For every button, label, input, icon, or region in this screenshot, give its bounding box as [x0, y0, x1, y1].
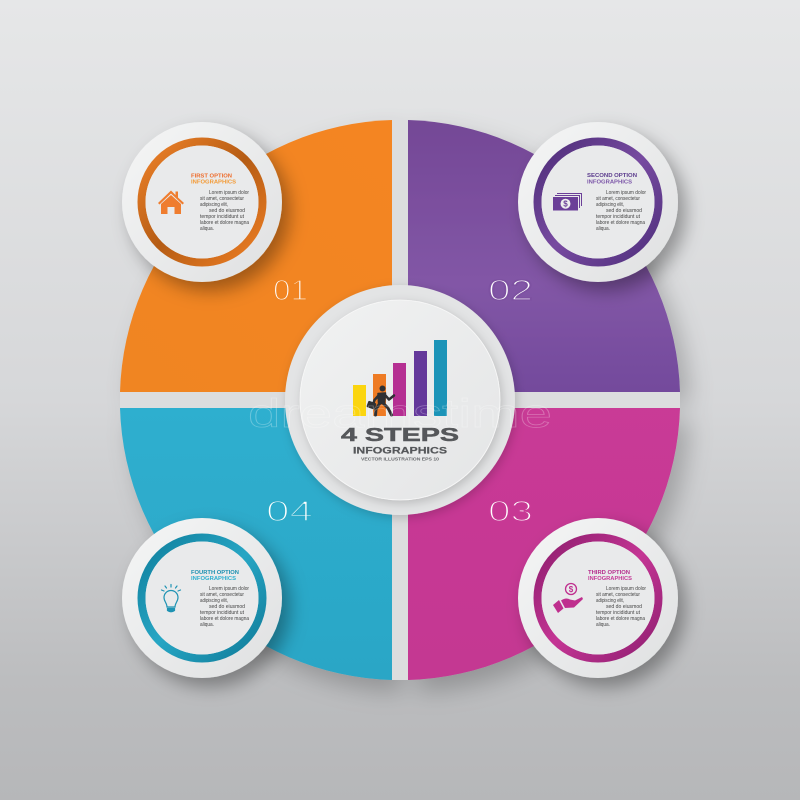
card body text: adipiscing elit,	[596, 598, 624, 604]
central hub	[285, 285, 515, 515]
card body text: sit amet, consectetur	[200, 592, 244, 598]
card body text: Lorem ipsum dolor	[209, 586, 249, 592]
card body text	[200, 586, 249, 628]
option card 2: second option	[518, 122, 678, 282]
card body text: sit amet, consectetur	[596, 592, 640, 598]
card body text: labore et dolore magna	[200, 616, 249, 622]
card inner disc	[542, 146, 654, 258]
accent ring	[142, 142, 262, 262]
card heading: FOURTH OPTION	[191, 570, 239, 576]
card heading	[587, 173, 637, 186]
card body text: adipiscing elit,	[200, 202, 228, 208]
bar chart icon	[353, 340, 447, 416]
option card 4: fourth option	[122, 518, 282, 678]
card body text: sed do eiusmod	[209, 604, 245, 610]
quadrant 03 magenta	[408, 408, 680, 680]
divider cross between quadrants	[120, 120, 680, 680]
card body text: sit amet, consectetur	[200, 196, 244, 202]
card body text: labore et dolore magna	[200, 220, 249, 226]
card body text: sed do eiusmod	[606, 208, 642, 214]
icon: banknotes	[553, 194, 582, 210]
number 01: 01	[273, 275, 308, 307]
card body text: tempor incididunt ut	[200, 214, 245, 220]
card body text	[596, 190, 646, 232]
card inner disc	[146, 146, 258, 258]
card body text: sed do eiusmod	[209, 208, 245, 214]
card heading	[588, 570, 633, 582]
card heading: THIRD OPTION	[588, 570, 630, 576]
card body text: aliqua.	[200, 226, 214, 232]
number 02: 02	[488, 275, 533, 307]
card disc	[518, 518, 678, 678]
card body text: labore et dolore magna	[596, 616, 645, 622]
card body text: tempor incididunt ut	[596, 214, 641, 220]
accent ring	[538, 142, 658, 262]
card heading: FIRST OPTION	[191, 174, 232, 180]
card body text: tempor incididunt ut	[596, 610, 641, 616]
card body text: tempor incididunt ut	[200, 610, 245, 616]
icon: banknotes: $	[563, 200, 568, 208]
hub outer ring	[285, 285, 515, 515]
card body text: aliqua.	[596, 226, 610, 232]
icon: running businessman	[367, 386, 394, 415]
hub inner disc	[300, 300, 500, 500]
card body text: sit amet, consectetur	[596, 196, 640, 202]
card disc	[122, 122, 282, 282]
pie chart: four coloured quadrants	[120, 120, 680, 680]
card body text: adipiscing elit,	[200, 598, 228, 604]
card heading: INFOGRAPHICS	[587, 180, 633, 186]
card body text	[596, 586, 646, 628]
quadrant 04 teal	[120, 408, 392, 680]
card body text: aliqua.	[596, 622, 610, 628]
number 04: 04	[266, 496, 313, 528]
card disc	[518, 122, 678, 282]
card body text: labore et dolore magna	[596, 220, 645, 226]
watermark: dreamstime	[248, 392, 552, 436]
card body text	[200, 190, 249, 232]
card heading: SECOND OPTION	[587, 173, 637, 179]
card heading: INFOGRAPHICS	[588, 576, 633, 582]
card body text: adipiscing elit,	[596, 202, 624, 208]
quadrant 01 orange	[120, 120, 392, 392]
card body text: Lorem ipsum dolor	[606, 190, 646, 196]
hub small caption: VECTOR ILLUSTRATION EPS 10	[361, 456, 440, 462]
card inner disc	[542, 542, 654, 654]
option card 1: first option	[122, 122, 282, 282]
card heading	[191, 570, 239, 582]
card body text: Lorem ipsum dolor	[209, 190, 249, 196]
icon: house	[158, 190, 184, 214]
icon: hand holding coin: $	[569, 585, 574, 594]
card heading: INFOGRAPHICS	[191, 180, 237, 186]
card heading	[191, 174, 237, 186]
card heading: INFOGRAPHICS	[191, 576, 237, 582]
accent ring	[538, 538, 658, 658]
icon: hand holding coin	[553, 584, 583, 613]
hub subtitle: INFOGRAPHICS	[353, 446, 447, 456]
card inner disc	[146, 542, 258, 654]
number 03: 03	[488, 496, 533, 528]
card body text: Lorem ipsum dolor	[606, 586, 646, 592]
icon: light bulb	[162, 584, 180, 612]
card disc	[122, 518, 282, 678]
accent ring	[142, 538, 262, 658]
quadrant 02 purple	[408, 120, 680, 392]
card body text: aliqua.	[200, 622, 214, 628]
hub title: 4 STEPS	[341, 424, 459, 445]
option card 3: third option	[518, 518, 678, 678]
card body text: sed do eiusmod	[606, 604, 642, 610]
